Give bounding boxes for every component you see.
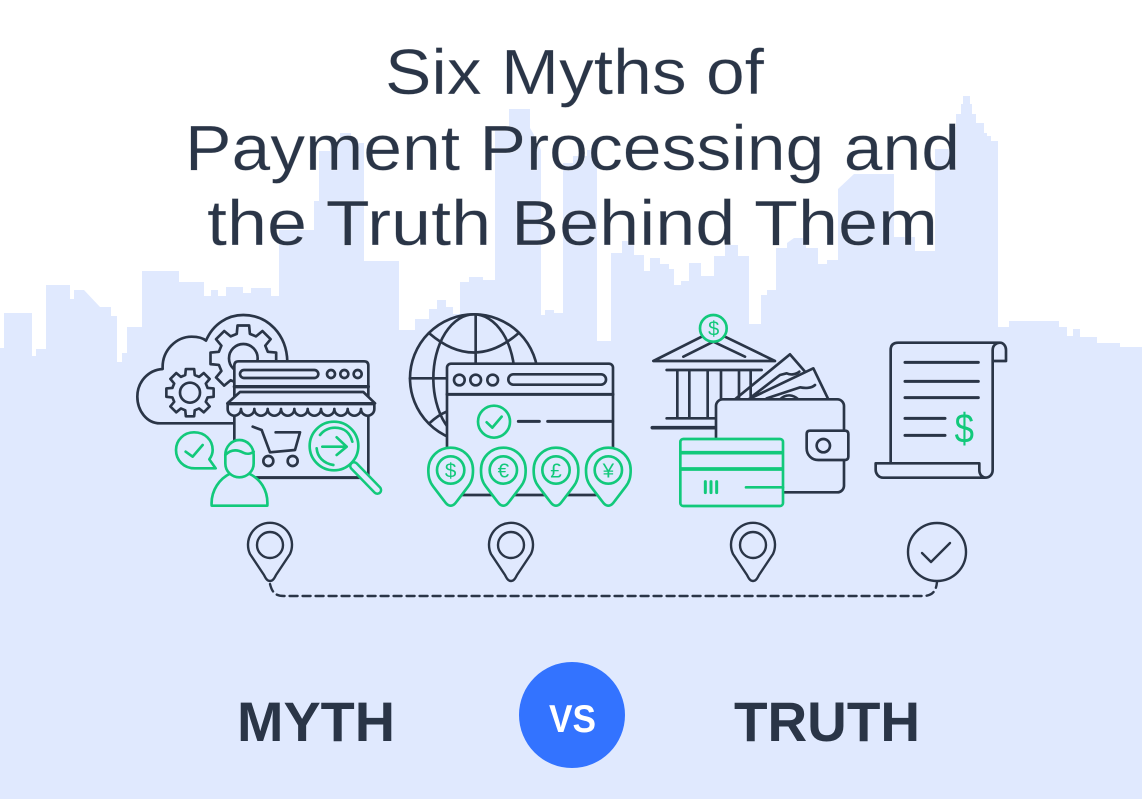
title: Six Myths of (385, 36, 764, 108)
myth label: MYTH (237, 690, 395, 753)
receipt dollar sign: $ (955, 406, 974, 452)
pin 2 (489, 523, 533, 581)
small gear (166, 369, 214, 416)
dashed route line (270, 582, 937, 596)
icon: global web payments with currency pins (410, 314, 631, 506)
dollar coin: $ (708, 319, 719, 341)
truth check circle (908, 523, 966, 581)
yen pin (586, 448, 631, 506)
route: three pins, check and dashed line (248, 523, 966, 596)
store window (234, 361, 368, 478)
icon: online store with cloud, gears, shopper and magnifier (137, 315, 377, 506)
pound pin: £ (550, 459, 562, 482)
banknotes (735, 354, 828, 399)
verified check (478, 406, 510, 438)
receipt lines (905, 362, 978, 435)
pin 1 (248, 523, 292, 581)
speech bubble with check (176, 432, 216, 468)
yen pin: ¥ (602, 459, 615, 482)
scroll outline (876, 343, 1006, 478)
vs badge: VS (549, 698, 596, 741)
magnifier with arrow (310, 422, 377, 490)
icon: receipt scroll with dollar (876, 343, 1006, 478)
euro pin (481, 448, 526, 506)
title: the Truth Behind Them (207, 187, 938, 259)
pound pin (534, 448, 578, 506)
pin 3 (731, 523, 775, 581)
icon: bank, wallet and card (652, 315, 848, 506)
dollar pin (428, 448, 473, 506)
large gear (210, 325, 276, 391)
title (185, 36, 960, 259)
browser window (447, 364, 613, 495)
globe (410, 314, 538, 442)
vs badge (519, 662, 625, 768)
striped awning (227, 392, 375, 416)
title: Payment Processing and (185, 112, 960, 184)
shopping cart (253, 427, 300, 466)
dollar pin: $ (445, 459, 457, 482)
dollar coin (700, 315, 727, 342)
cloud outline (137, 315, 287, 423)
euro pin: € (498, 459, 510, 482)
wallet (716, 399, 848, 492)
bank building (652, 337, 775, 428)
truth label: TRUTH (734, 690, 920, 753)
credit card (680, 439, 783, 506)
shopper figure (212, 440, 267, 506)
